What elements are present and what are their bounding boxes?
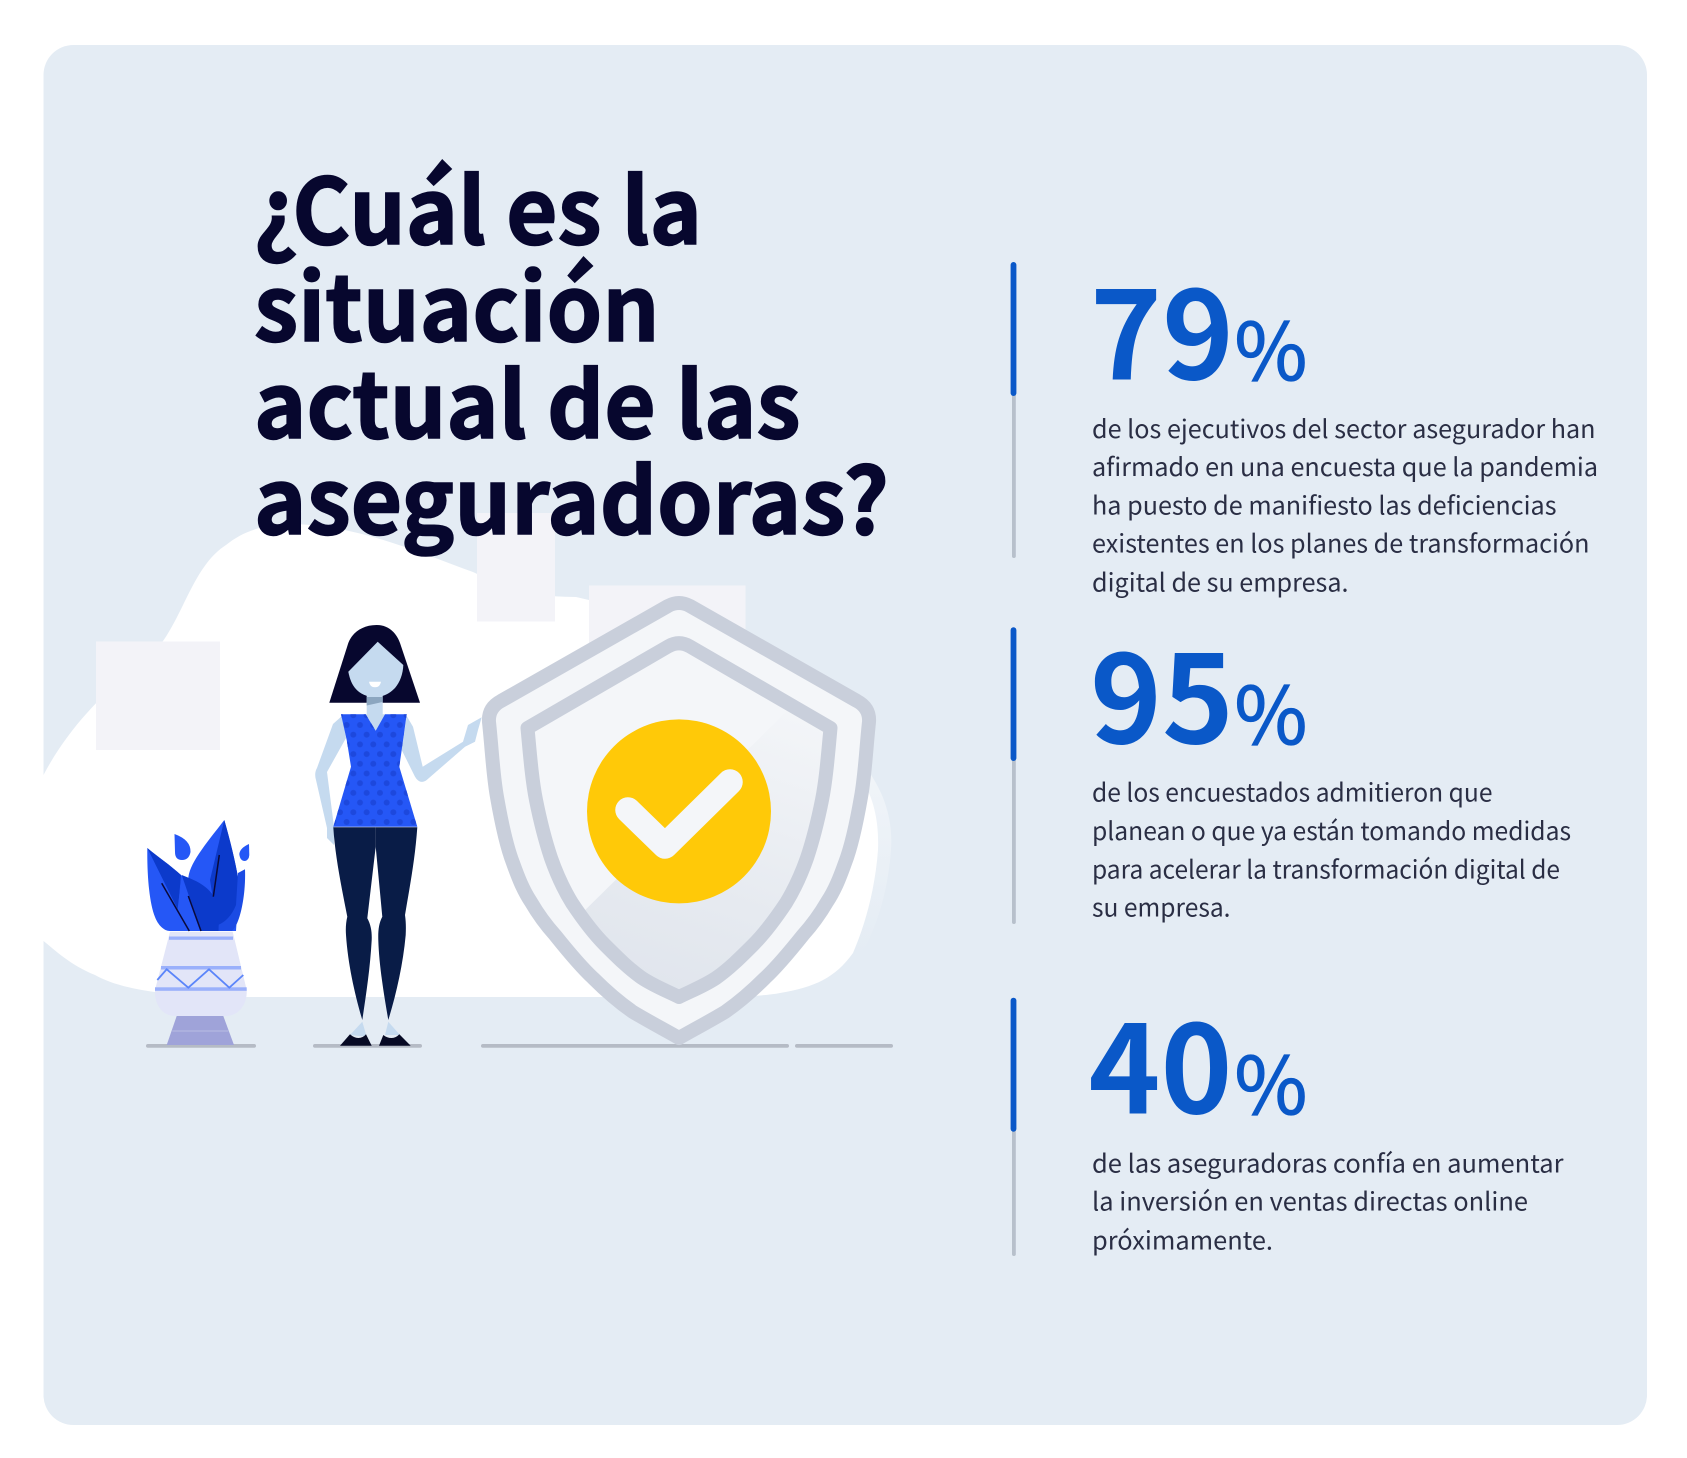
title: aseguradoras? (254, 429, 889, 561)
divider bar (1011, 627, 1016, 924)
neck (367, 695, 383, 719)
description: de las aseguradoras confía en aumentar (1092, 1145, 1564, 1181)
title: actual de las (254, 333, 800, 465)
mouth (369, 682, 381, 687)
vase bands (155, 936, 247, 991)
description (1092, 1145, 1564, 1257)
background blob: light layer (820, 760, 891, 958)
description: existentes en los planes de transformación (1092, 525, 1590, 561)
right arm (402, 716, 482, 782)
shield outer (489, 603, 869, 1038)
description: para acelerar la transformación digital de (1092, 850, 1560, 886)
vase base (167, 1016, 234, 1045)
description: digital de su empresa. (1092, 564, 1348, 600)
legs (333, 827, 417, 1020)
description: la inversión en ventas directas online (1092, 1183, 1528, 1219)
description: de los ejecutivos del sector asegurador han (1092, 410, 1596, 446)
title: ¿Cuál es la (254, 139, 702, 271)
shield inner outline (528, 643, 830, 997)
shoes (340, 1034, 411, 1046)
ground lines (146, 1044, 893, 1048)
neckline (366, 714, 385, 731)
icon: shield (489, 603, 869, 1038)
description: ha puesto de manifiesto las deficiencias (1092, 486, 1556, 522)
droplets (174, 834, 191, 860)
figure: woman (315, 625, 482, 1046)
title: situación (254, 236, 660, 368)
number: 40 (1088, 972, 1232, 1150)
vase (155, 932, 247, 1016)
number: % (1234, 288, 1307, 403)
number: % (1234, 652, 1307, 767)
divider bar (1011, 998, 1016, 1256)
title (254, 139, 889, 561)
top dot pattern (333, 714, 417, 827)
icon: potted plant (147, 820, 249, 1045)
description (1092, 410, 1598, 600)
description: próximamente. (1092, 1221, 1273, 1257)
description: de los encuestados admitieron que (1092, 774, 1492, 810)
hair (329, 625, 420, 703)
decorative square left (96, 642, 220, 750)
description: su empresa. (1092, 889, 1230, 925)
blue top (333, 714, 417, 827)
decorative square centre (477, 513, 555, 622)
yellow circle (587, 719, 771, 903)
ankles (350, 1022, 400, 1037)
number: % (1234, 1022, 1307, 1137)
number: 79 (1090, 238, 1234, 416)
leaf veins (162, 855, 219, 931)
number: 95 (1090, 602, 1234, 780)
background blob: white (44, 524, 878, 997)
stat block: 40% (1011, 972, 1564, 1257)
description: planean o que ya están tomando medidas (1092, 812, 1571, 848)
vase zigzag (157, 969, 243, 988)
check mark (628, 782, 730, 846)
neck shadow (367, 697, 383, 706)
shield inner shaded wedge (586, 823, 806, 989)
decorative square right (589, 586, 746, 696)
description: afirmado en una encuesta que la pandemia (1092, 448, 1598, 484)
stat block: 95% (1011, 602, 1571, 925)
divider bar (1011, 262, 1016, 558)
stat block: 79% (1011, 238, 1598, 600)
description (1092, 774, 1571, 925)
leaves (147, 820, 245, 931)
illustration: scene (44, 513, 893, 1048)
left arm (315, 716, 346, 845)
face (348, 642, 403, 697)
